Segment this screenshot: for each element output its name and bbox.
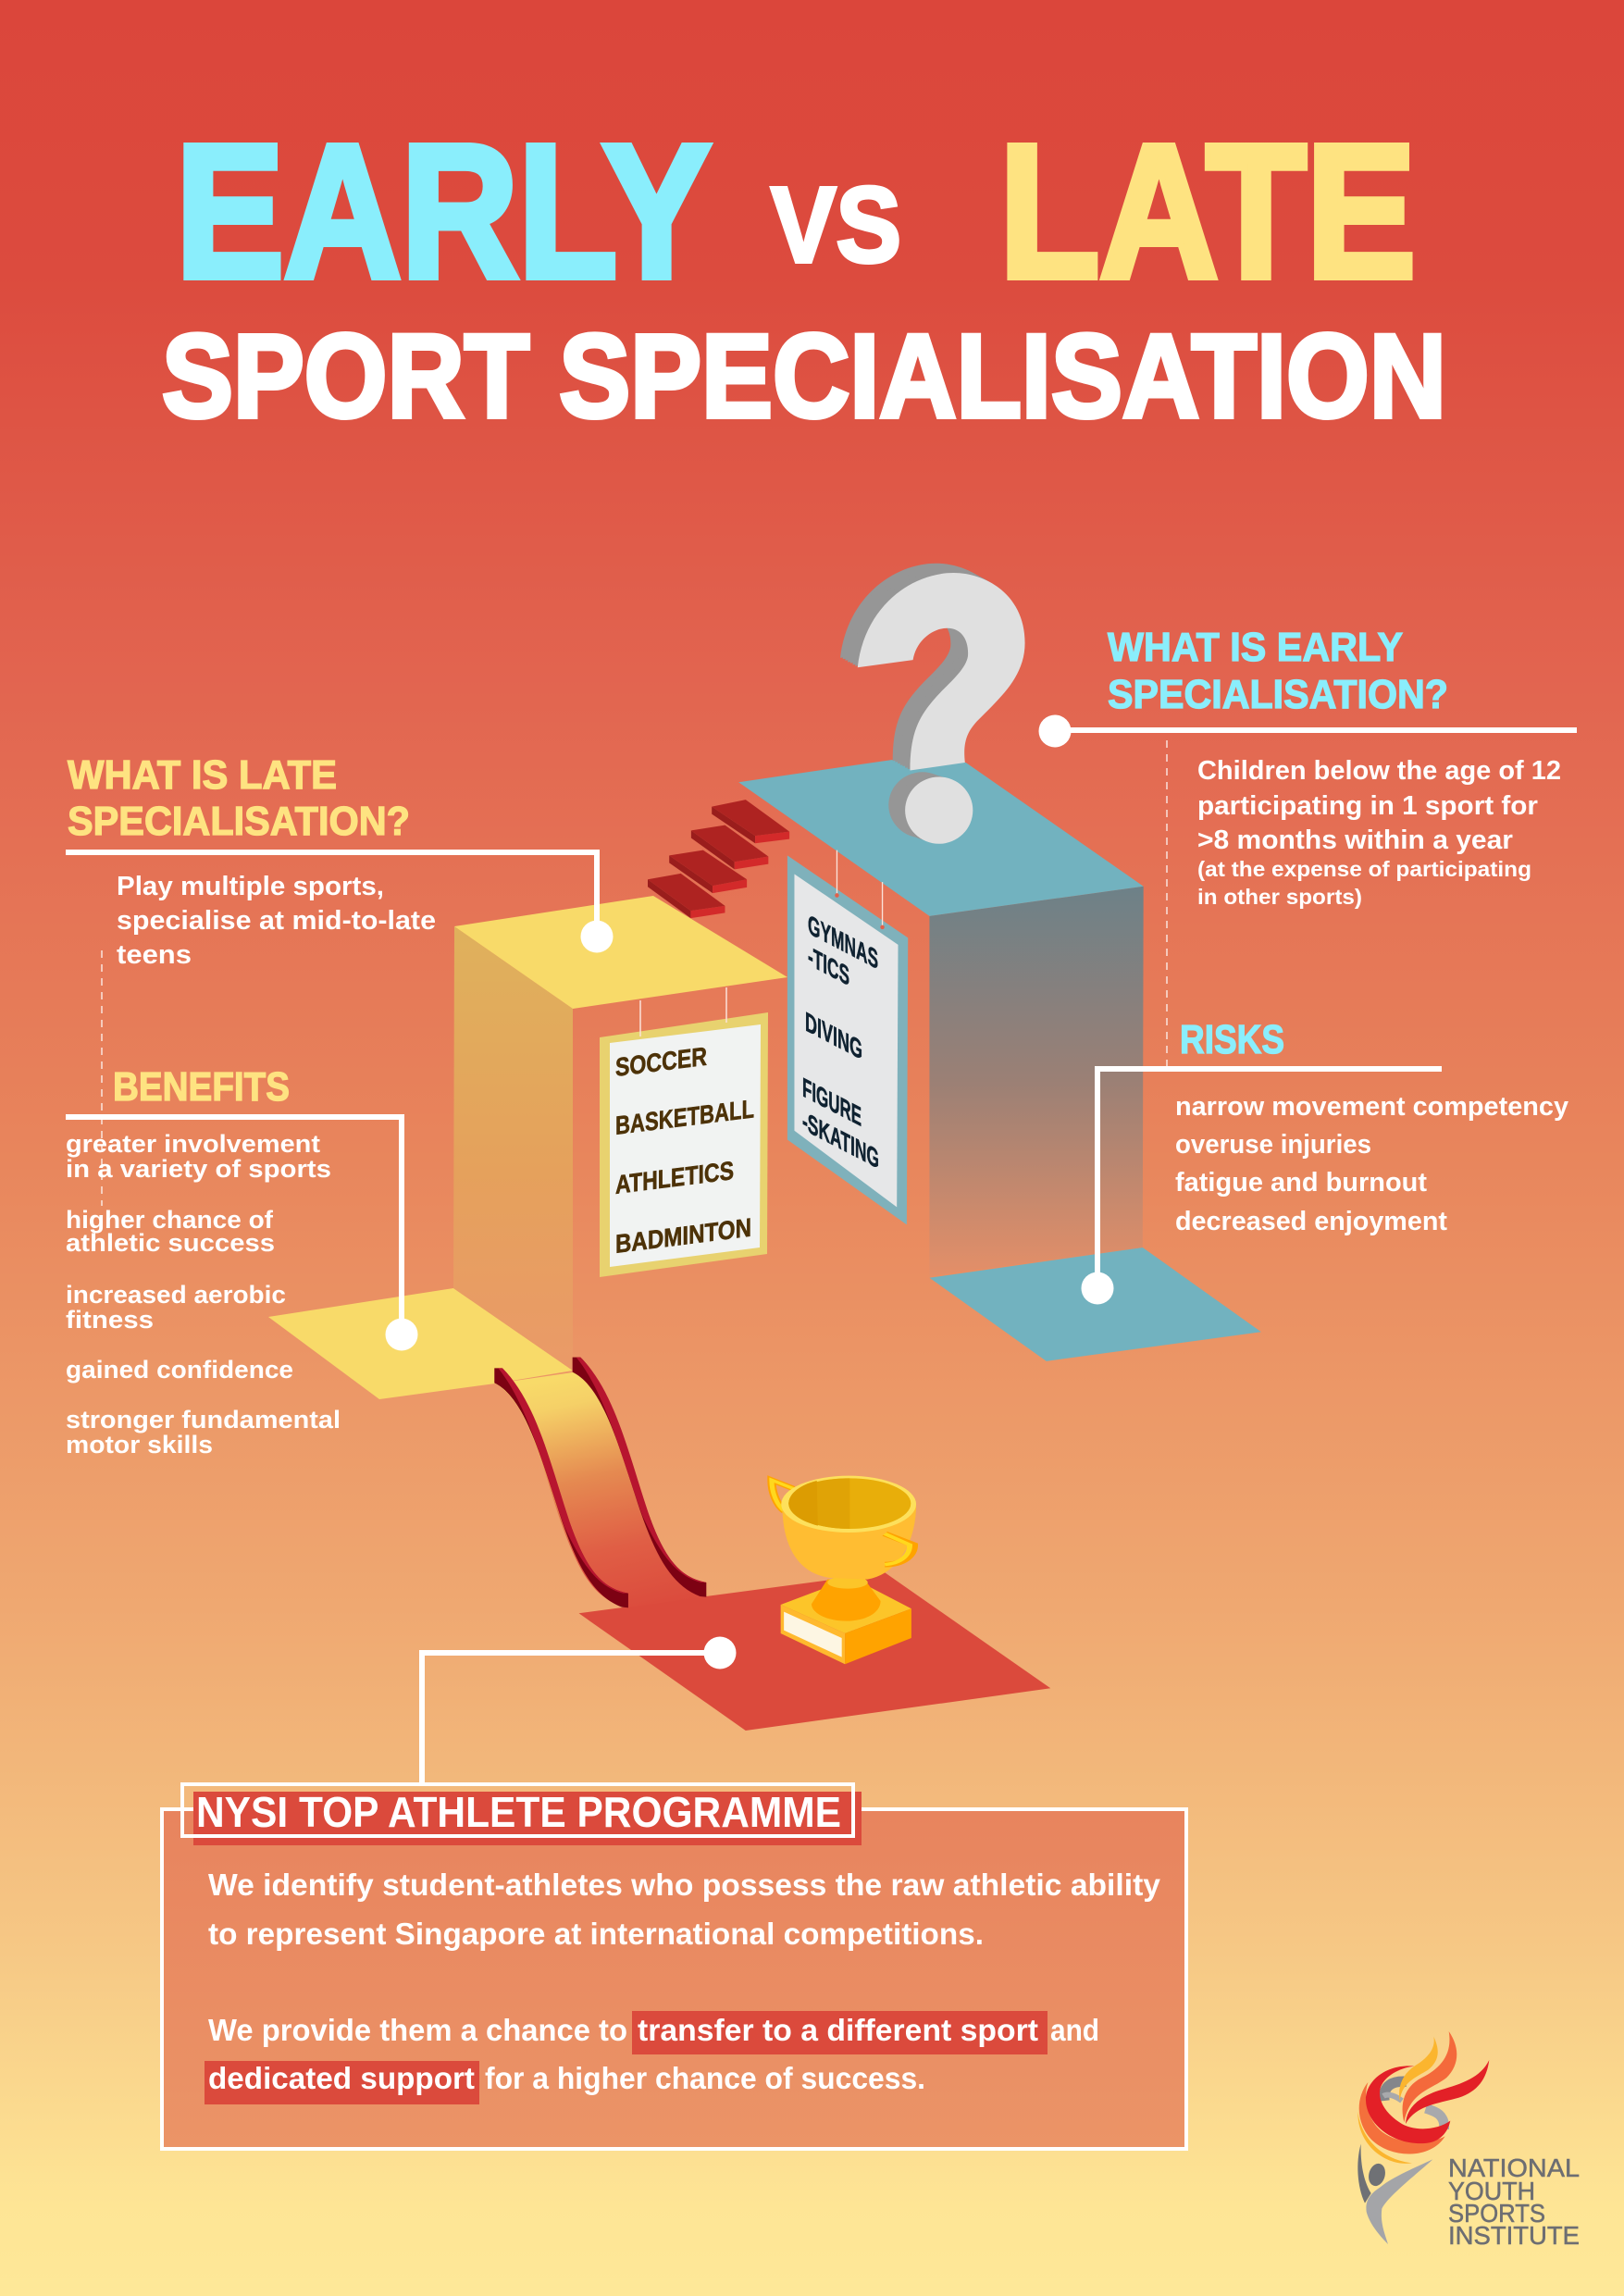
description: late specialisation: Play multiple sports, <box>117 872 384 901</box>
left slide rail <box>494 1368 628 1607</box>
description: late specialisation: teens <box>117 940 192 970</box>
description: late specialisation <box>117 872 436 970</box>
list: benefits: fitness <box>66 1306 154 1334</box>
heading: what is late <box>68 752 410 844</box>
paragraph: support: and <box>1050 2013 1099 2047</box>
blue block right face <box>929 887 1144 1276</box>
icon: trophy <box>772 1476 916 1664</box>
list: benefits: athletic success <box>66 1229 275 1257</box>
connector: late benefits <box>66 1117 418 1351</box>
text block: benefits <box>66 1064 341 1458</box>
heading word: VS: VS <box>771 165 901 285</box>
right slide rail <box>573 1358 706 1597</box>
stairs <box>648 800 789 918</box>
sport: badminton: BADMINTON <box>615 1213 751 1259</box>
poster frame <box>600 1012 768 1277</box>
description: early specialisation: in other sports) <box>1197 885 1362 909</box>
list: benefits: gained confidence <box>66 1356 293 1384</box>
icon: question mark <box>840 564 1025 844</box>
heading: what is late: SPECIALISATION? <box>68 799 410 844</box>
description: early specialisation: (at the expense of participating <box>1197 857 1531 881</box>
list: benefits: higher chance of <box>66 1206 274 1234</box>
description: late specialisation: specialise at mid-to-late <box>117 906 436 936</box>
list: risks: fatigue and burnout <box>1175 1168 1427 1198</box>
slide and trophy <box>494 1358 1050 1731</box>
sport: athletics: ATHLETICS <box>615 1156 734 1199</box>
list: risks: narrow movement competency <box>1175 1092 1568 1122</box>
logo wordmark: NATIONAL <box>1448 2153 1580 2182</box>
heading: what is late: WHAT IS LATE <box>68 752 337 798</box>
description: early specialisation: Children below the age of 12 <box>1197 756 1561 786</box>
heading: what is early: SPECIALISATION? <box>1108 672 1448 717</box>
list: benefits: in a variety of sports <box>66 1155 331 1183</box>
title <box>162 105 1446 442</box>
red floor <box>579 1572 1050 1731</box>
yellow block left face <box>453 926 573 1371</box>
text block: what is late specialisation <box>68 752 436 970</box>
connector: what is late <box>66 852 613 953</box>
sport: diving: DIVING <box>805 1006 862 1066</box>
yellow block top <box>454 896 787 1009</box>
list: benefits: increased aerobic <box>66 1281 286 1309</box>
heading: risks: RISKS <box>1180 1017 1284 1062</box>
sport: soccer: SOCCER <box>615 1042 707 1082</box>
sport: gymnastics: GYMNAS <box>808 909 878 975</box>
connector: risks <box>1081 1069 1442 1305</box>
list: risks: overuse injuries <box>1175 1130 1371 1160</box>
paragraph: identification: We identify student-athletes who possess the raw athletic ability <box>208 1868 1161 1902</box>
slide surface <box>495 1372 705 1607</box>
heading: what is early <box>1108 625 1448 717</box>
icon: torch emblem <box>1357 2031 1489 2244</box>
paragraph: support: for a higher chance of success. <box>485 2061 925 2095</box>
sport: figure skating: FIGURE <box>802 1072 862 1133</box>
paragraph: identification: to represent Singapore at international competitions. <box>208 1917 984 1951</box>
list: benefits <box>66 1130 341 1458</box>
heading: what is early: WHAT IS EARLY <box>1108 625 1403 670</box>
list: benefits: stronger fundamental <box>66 1406 341 1433</box>
logo wordmark: SPORTS <box>1448 2199 1545 2228</box>
paragraph: support: dedicated support <box>208 2061 475 2095</box>
list: benefits: motor skills <box>66 1431 213 1458</box>
connector: what is early <box>1038 714 1577 748</box>
paragraph: support <box>205 2011 1099 2104</box>
list: risks: decreased enjoyment <box>1175 1207 1447 1236</box>
panel: late specialisation platform <box>268 896 787 1399</box>
text block: risks <box>1175 1017 1568 1236</box>
panel box <box>162 1809 1186 2149</box>
panel title tag: NYSI TOP ATHLETE PROGRAMME <box>196 1788 841 1836</box>
logo wordmark <box>1448 2153 1580 2250</box>
paragraph: support: transfer to a different sport <box>638 2013 1038 2047</box>
list: risks <box>1175 1092 1568 1236</box>
blue floor <box>929 1247 1261 1361</box>
description: early specialisation <box>1197 756 1561 909</box>
heading word: EARLY: EARLY <box>176 105 711 317</box>
heading word: LATE: LATE <box>999 105 1416 317</box>
paragraph: identification <box>208 1868 1161 1951</box>
poster: early specialisation sports <box>802 909 879 1175</box>
connector: programme <box>422 1636 737 1786</box>
paragraph: support: We provide them a chance to <box>208 2013 627 2047</box>
logo wordmark: YOUTH <box>1448 2177 1535 2205</box>
poster paper <box>610 1024 761 1267</box>
panel: NYSI top athlete programme <box>162 1784 1186 2149</box>
hanging strings <box>640 987 726 1036</box>
sport: figure skating continued: -SKATING <box>802 1105 879 1175</box>
heading: benefits: BENEFITS <box>113 1064 290 1110</box>
description: early specialisation: >8 months within a year <box>1197 825 1513 855</box>
description: early specialisation: participating in 1 sport for <box>1197 791 1538 821</box>
sport: basketball: BASKETBALL <box>615 1094 754 1140</box>
text block: what is early specialisation <box>1108 625 1561 909</box>
blue block top <box>738 760 1144 916</box>
sport: gymnastics continued: -TICS <box>808 940 849 992</box>
logo wordmark: INSTITUTE <box>1448 2221 1580 2250</box>
list: benefits: greater involvement <box>66 1130 320 1158</box>
panel: early specialisation platform <box>648 564 1261 1361</box>
logo: National Youth Sports Institute <box>1357 2031 1580 2250</box>
yellow floor <box>268 1288 573 1399</box>
blue poster frame <box>787 850 908 1224</box>
poster: late specialisation sports <box>600 987 768 1277</box>
heading line: sport specialisation: SPORT SPECIALISATION <box>162 311 1446 442</box>
